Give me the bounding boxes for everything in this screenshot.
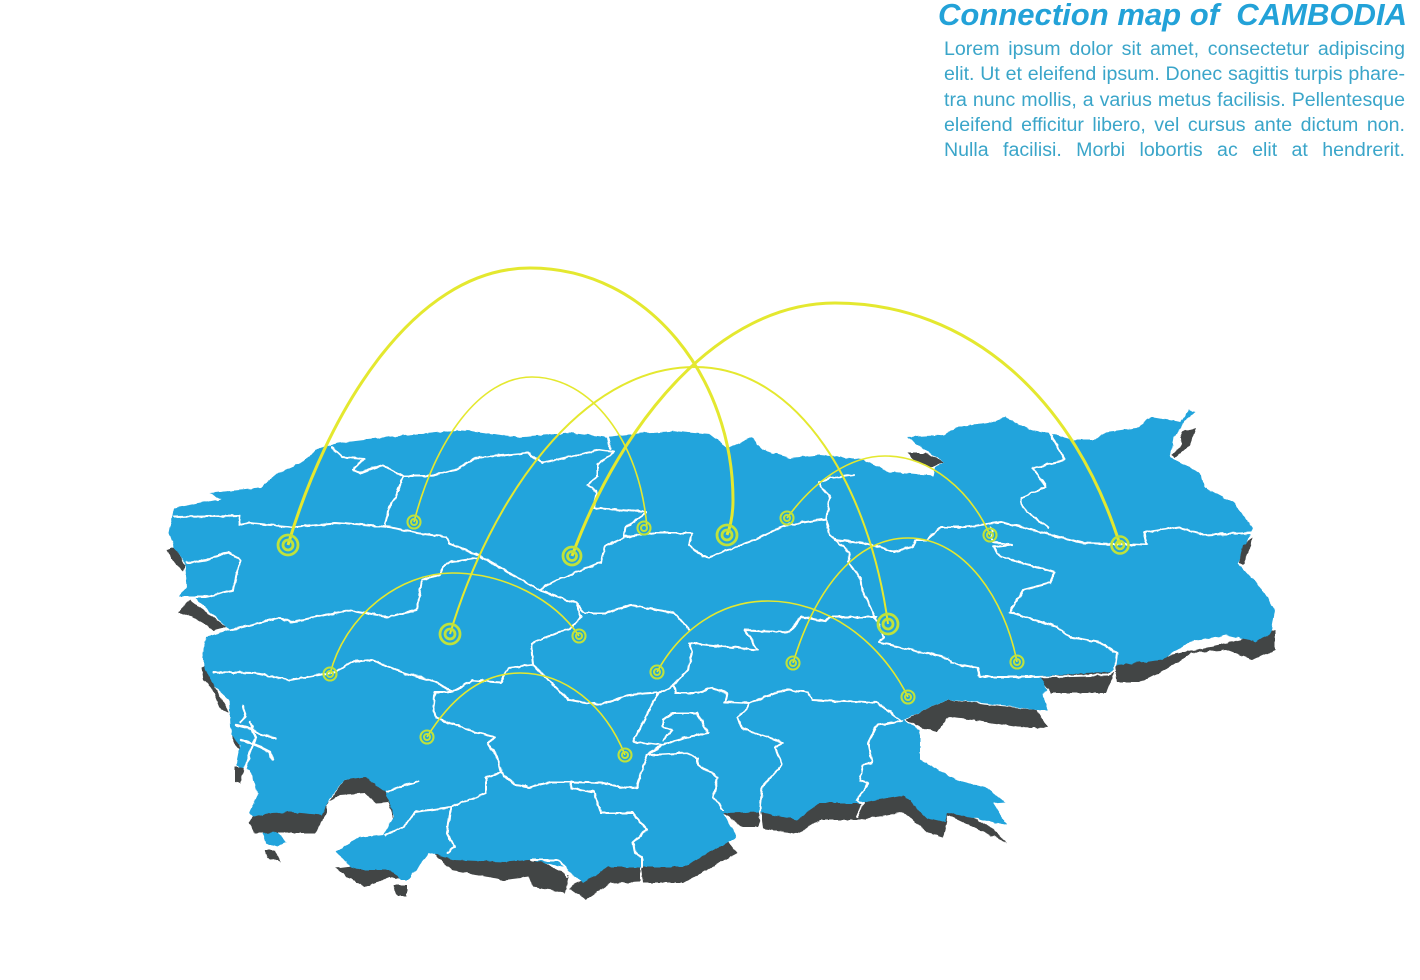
- marker: small 12: [618, 748, 632, 762]
- arc: thin east: [793, 538, 1017, 663]
- map shadow: [167, 428, 1275, 900]
- province borders: [174, 433, 1251, 877]
- connection markers: [278, 512, 1128, 762]
- marker: large 1: [278, 535, 298, 555]
- marker: small 10: [1010, 656, 1024, 668]
- marker: large 6: [1112, 536, 1128, 554]
- marker: small 7: [650, 666, 664, 678]
- description text block: [944, 38, 1405, 161]
- marker: large 4: [717, 525, 737, 545]
- connection arcs: [288, 268, 1120, 755]
- arc: thick west: [288, 268, 733, 545]
- marker: large 5: [878, 614, 898, 634]
- marker: small 8: [786, 656, 800, 670]
- map land: [169, 410, 1275, 883]
- description text block: Nulla facilisi. Morbi lobortis ac elit at hendrerit.: [944, 139, 1405, 161]
- marker: small 5: [324, 668, 336, 680]
- description text block: tra nunc mollis, a varius metus facilisis. Pellentesque: [944, 89, 1405, 111]
- arc: thin west: [330, 573, 579, 674]
- arc: thick east: [572, 303, 1120, 556]
- map of Cambodia: [167, 410, 1275, 900]
- east coast shadow strip: [1239, 538, 1252, 565]
- description text block: elit. Ut et eleifend ipsum. Donec sagittis turpis phare-: [944, 63, 1405, 85]
- arc: medium centre: [450, 367, 888, 634]
- marker: small 4: [984, 528, 996, 542]
- marker: large 2: [440, 624, 460, 644]
- marker: large 3: [563, 547, 581, 565]
- marker: small 3: [780, 512, 794, 524]
- arc: thin northeast: [787, 456, 990, 535]
- small coastal islands: [263, 832, 286, 847]
- arc: thin south: [427, 673, 625, 755]
- marker: small 11: [420, 730, 434, 744]
- marker: small 2: [638, 522, 650, 534]
- marker: small 6: [572, 630, 586, 642]
- marker: small 9: [902, 690, 914, 704]
- arc: thin northwest: [414, 377, 647, 528]
- marker: small 1: [408, 516, 420, 528]
- description text block: eleifend efficitur libero, vel cursus ante dictum non.: [944, 114, 1405, 136]
- description text block: Lorem ipsum dolor sit amet, consectetur adipiscing: [944, 38, 1405, 60]
- arc: thin centre: [657, 601, 908, 697]
